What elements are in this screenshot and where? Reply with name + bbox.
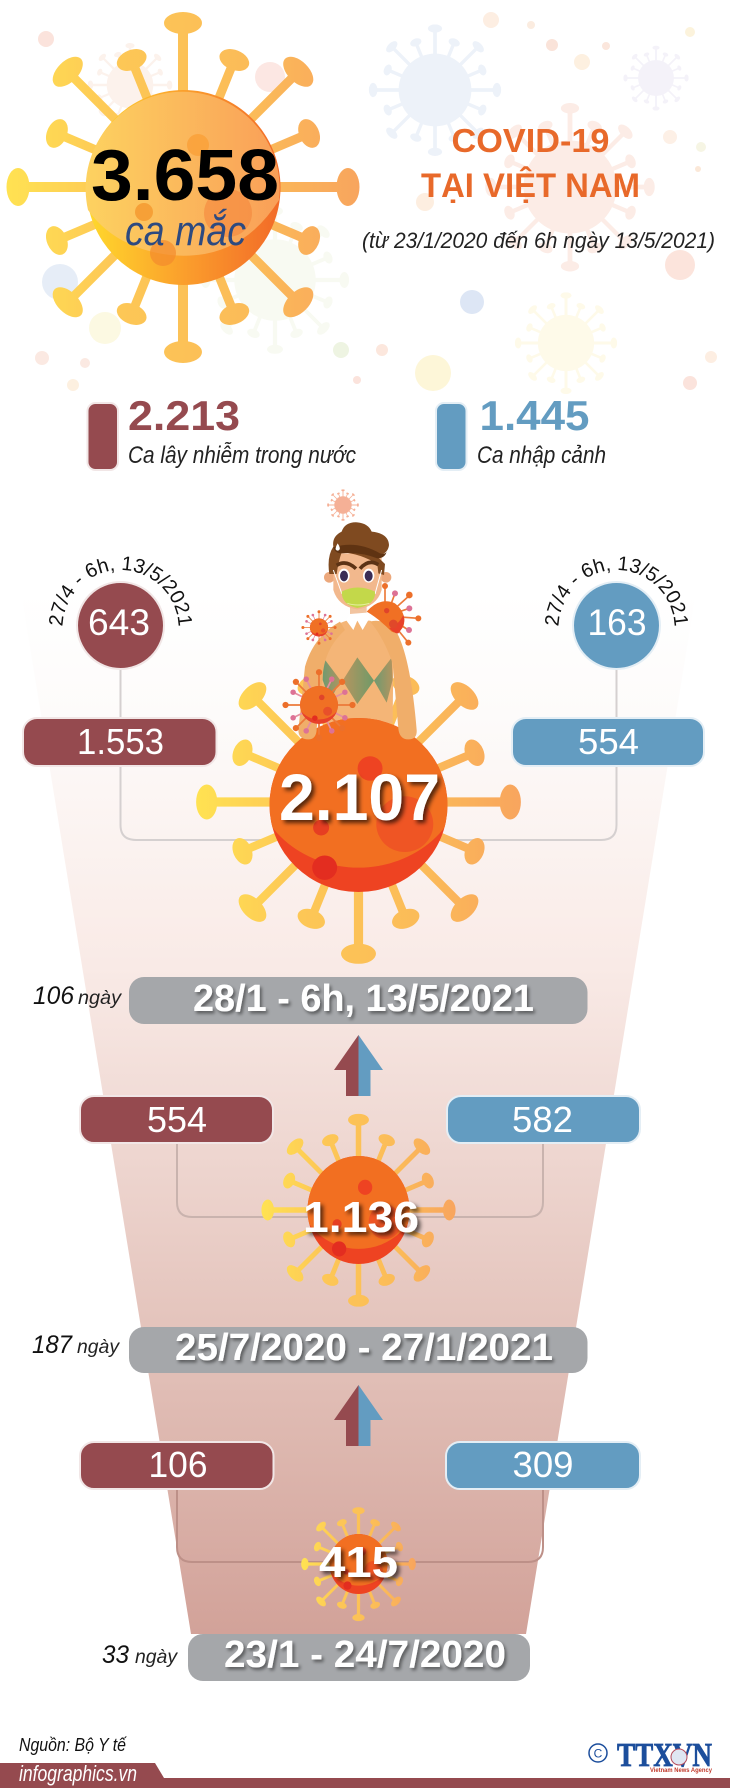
box: imported 582 — [447, 1096, 640, 1143]
logo: TTXVN: Vietnam News Agency — [650, 1767, 712, 1774]
duration: 106 days — [33, 982, 123, 1010]
box: domestic 554 — [80, 1096, 273, 1143]
icon: virus on chest — [282, 669, 356, 741]
duration: 187 days — [32, 1331, 121, 1359]
period bar: 23/1 - 24/7/2020: 23/1 - 24/7/2020 — [224, 1634, 506, 1676]
box: domestic 554: 554 — [147, 1099, 207, 1140]
logo: TTXVN — [589, 1737, 712, 1774]
box: imported 309 — [446, 1442, 640, 1489]
legend: imported cases — [436, 392, 606, 470]
circle: domestic latest — [77, 582, 164, 669]
box: imported 309: 309 — [512, 1444, 574, 1485]
arrow up 2 — [334, 1385, 383, 1446]
box: domestic 1.553 — [23, 718, 216, 766]
connector lines: bottom tier — [177, 1489, 543, 1562]
box: imported 582: 582 — [512, 1099, 573, 1140]
duration: 187 days: 187 — [32, 1331, 73, 1359]
duration: 33 days: 33 — [102, 1641, 129, 1669]
box: imported 554 — [512, 718, 704, 766]
legend: domestic cases: 2.213 — [128, 392, 240, 439]
total label: ca mắc — [125, 207, 246, 254]
footer strip: infographics.vn — [19, 1761, 137, 1786]
circle: domestic latest: 643 — [88, 602, 150, 643]
duration: 187 days: ngày — [77, 1337, 121, 1358]
period bar: 28/1 - 6h, 13/5/2021 — [129, 977, 588, 1024]
curved date: domestic: 27/4 - 6h, 13/5/2021 — [49, 556, 192, 626]
connector lines: top tier — [120, 669, 616, 840]
icon: person with mask — [310, 522, 393, 723]
total count: 3.658 — [91, 136, 279, 216]
source: Nguồn: Bộ Y tế — [19, 1735, 128, 1755]
legend: domestic cases — [88, 392, 356, 470]
period bar: 25/7/2020 - 27/1/2021: 25/7/2020 - 27/1/2021 — [175, 1327, 553, 1369]
connector lines: middle tier — [177, 1143, 543, 1217]
number 2.107: 2.107 — [279, 760, 440, 834]
circle: imported latest — [573, 582, 660, 669]
box: imported 554: 554 — [578, 721, 639, 762]
arrow up 1 — [334, 1035, 383, 1096]
title — [421, 122, 640, 205]
footer strip — [0, 1761, 730, 1788]
title: TẠI VIỆT NAM — [421, 167, 640, 205]
legend: domestic cases: Ca lây nhiễm trong nước — [128, 441, 356, 469]
box: domestic 1.553: 1.553 — [77, 721, 164, 762]
main virus: 3.658 cases — [3, 7, 363, 367]
box: domestic 106: 106 — [148, 1444, 208, 1485]
duration: 33 days — [102, 1641, 179, 1669]
title: COVID-19 — [452, 122, 610, 159]
small virus: 415 — [300, 1506, 417, 1622]
icon: small faint virus above head — [327, 489, 359, 521]
number 1.136: 1.136 — [303, 1193, 419, 1242]
number 415: 415 — [319, 1538, 398, 1587]
subtitle date range: (từ 23/1/2020 đến 6h ngày 13/5/2021) — [362, 228, 715, 253]
faint background viruses and dots — [35, 12, 717, 395]
duration: 106 days: 106 — [33, 982, 74, 1010]
duration: 33 days: ngày — [135, 1647, 179, 1668]
curved date: imported: 27/4 - 6h, 13/5/2021 — [545, 556, 688, 626]
virus body — [253, 680, 464, 892]
icon: small virus on left shoulder — [301, 610, 337, 645]
duration: 106 days: ngày — [78, 988, 123, 1009]
icon: virus on shoulder — [367, 583, 421, 646]
period bar: 28/1 - 6h, 13/5/2021: 28/1 - 6h, 13/5/2021 — [193, 978, 534, 1020]
circle: imported latest: 163 — [588, 602, 646, 643]
medium virus: 1.136 — [260, 1111, 458, 1309]
large virus with person: 2.107 — [193, 489, 524, 968]
box: domestic 106 — [80, 1442, 274, 1489]
person arms in front — [298, 621, 417, 739]
logo: TTXVN: C — [594, 1746, 603, 1760]
legend: imported cases: 1.445 — [480, 392, 590, 439]
funnel background — [21, 592, 696, 1634]
legend: imported cases: Ca nhập cảnh — [477, 442, 606, 469]
